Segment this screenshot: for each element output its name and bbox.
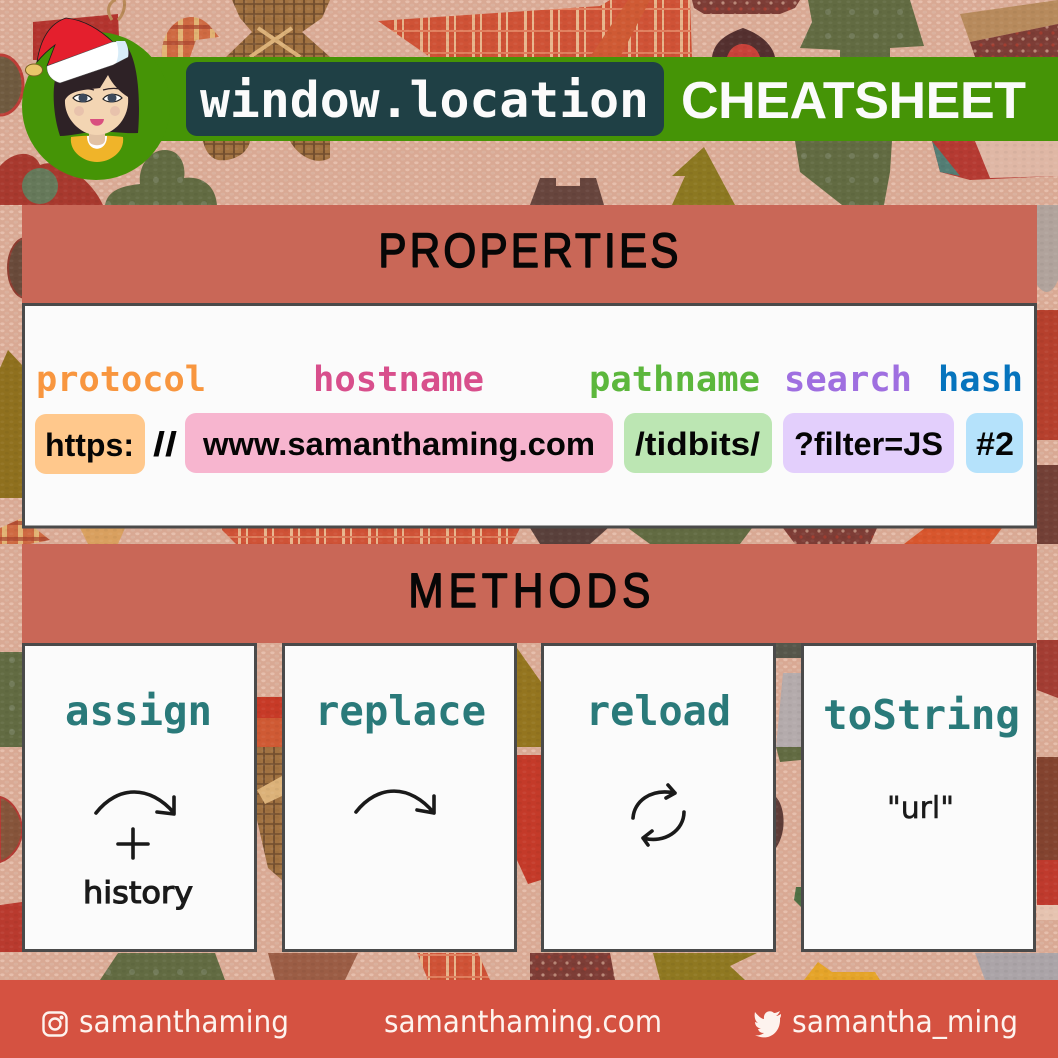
collar bbox=[87, 136, 107, 149]
hash pill: #2 bbox=[976, 426, 1014, 462]
icon: twitter bird bbox=[755, 1011, 781, 1037]
icon: forward arrow bbox=[96, 792, 174, 814]
replace title: replace bbox=[315, 687, 486, 735]
footer bbox=[0, 980, 1058, 1058]
website: samanthaming.com bbox=[384, 1005, 662, 1040]
panel: replace bbox=[284, 644, 516, 950]
santa hat bbox=[26, 18, 128, 83]
hostname label: hostname bbox=[313, 360, 484, 400]
url text: "url" bbox=[887, 791, 954, 826]
hostname pill bbox=[185, 413, 613, 473]
protocol pill bbox=[35, 414, 145, 474]
panel: assign bbox=[24, 644, 256, 950]
icon: forward arrow bbox=[356, 791, 434, 813]
title word: CHEATSHEET bbox=[681, 72, 1026, 130]
hash label: hash bbox=[938, 360, 1023, 400]
toString title: toString bbox=[823, 691, 1020, 739]
title code pill: window.location bbox=[200, 72, 649, 129]
search label: search bbox=[784, 360, 912, 400]
banner green strip bbox=[150, 57, 1058, 141]
panel: toString bbox=[802, 644, 1034, 950]
pathname label: pathname bbox=[589, 360, 760, 400]
properties heading bbox=[22, 205, 1037, 303]
pathname pill bbox=[624, 413, 772, 473]
face bbox=[65, 75, 128, 135]
protocol label: protocol bbox=[36, 360, 206, 400]
icon: instagram bbox=[44, 1012, 66, 1036]
instagram handle: samanthaming bbox=[79, 1005, 289, 1040]
avatar circle bbox=[22, 32, 170, 180]
hash pill bbox=[966, 413, 1023, 473]
panel: properties url breakdown bbox=[24, 304, 1036, 527]
pathname pill: /tidbits/ bbox=[635, 426, 760, 462]
hair bbox=[54, 48, 139, 136]
eyes and cheeks bbox=[73, 88, 124, 116]
lips bbox=[90, 119, 104, 126]
twitter handle: samantha_ming bbox=[792, 1005, 1018, 1040]
hostname pill: www.samanthaming.com bbox=[202, 426, 595, 462]
history text: history bbox=[83, 876, 193, 911]
panel: reload bbox=[542, 644, 774, 950]
protocol pill: https: bbox=[45, 427, 134, 463]
properties heading: PROPERTIES bbox=[378, 223, 678, 278]
slashes: // bbox=[153, 426, 178, 464]
search pill bbox=[783, 413, 954, 473]
search pill: ?filter=JS bbox=[794, 426, 943, 462]
icon: plus bbox=[118, 829, 148, 858]
assign title: assign bbox=[65, 687, 212, 735]
methods heading bbox=[22, 544, 1037, 643]
neck bbox=[89, 128, 105, 145]
reload title: reload bbox=[586, 687, 731, 735]
title banner bbox=[150, 57, 1058, 141]
avatar with santa hat bbox=[22, 18, 170, 180]
icon: refresh arrows bbox=[633, 785, 684, 845]
shirt bbox=[71, 136, 123, 162]
methods heading: METHODS bbox=[408, 563, 650, 618]
